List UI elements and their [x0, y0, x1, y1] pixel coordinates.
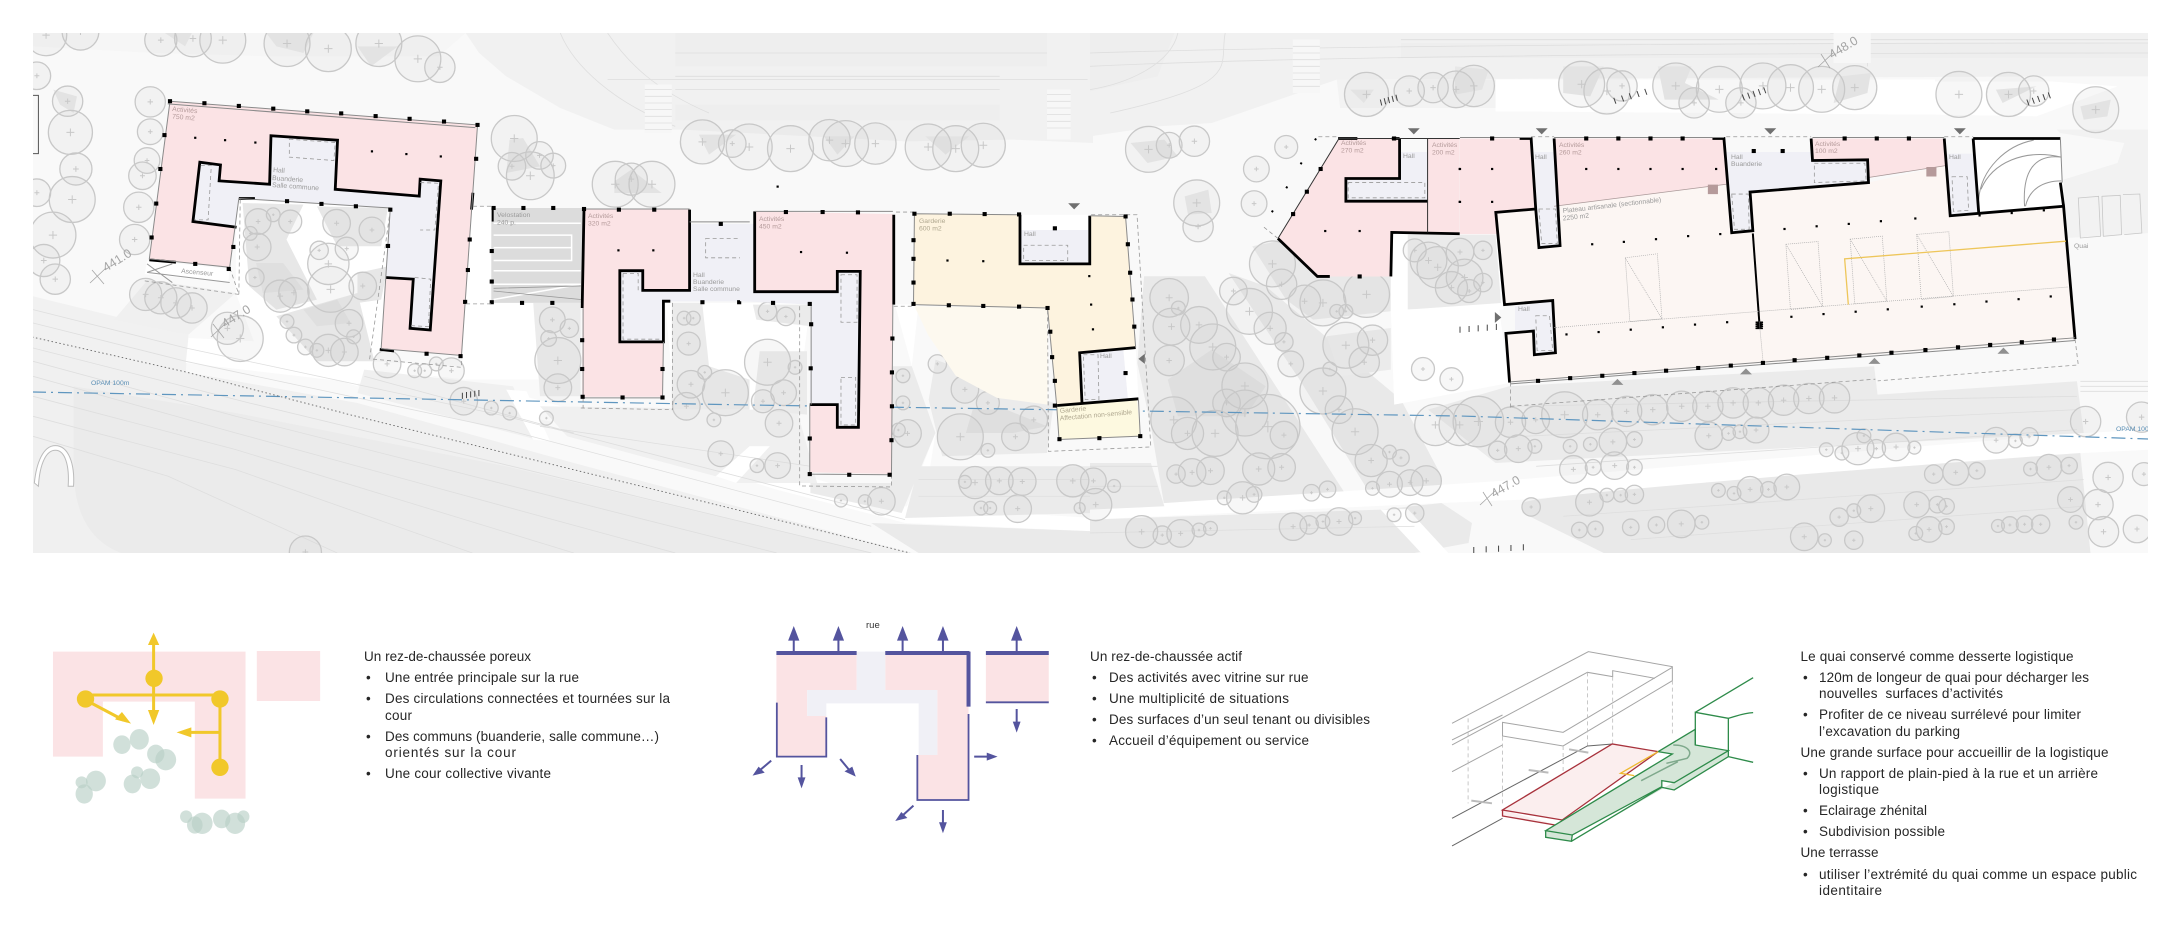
map labels: Salle commune: [693, 286, 740, 293]
map labels: Velostation: [497, 212, 530, 219]
elevator forecourt: [145, 261, 230, 283]
map labels: 270 m2: [1341, 148, 1364, 154]
map labels: Activités: [1432, 142, 1458, 149]
text: quay: Une grande surface pour accueillir de la logistique: [1800, 745, 2108, 760]
west section ground: [33, 33, 1093, 553]
text: active ground floor: Un rez-de-chaussée actif: [1090, 649, 1242, 664]
active facades: [776, 652, 1049, 707]
text: quay: identitaire: [1819, 883, 1882, 898]
activities 100 m2: [1813, 138, 1946, 177]
map labels: Plateau artisanale (sectionnable): [1562, 197, 1662, 215]
east section ground: [1090, 33, 2150, 553]
central trees: [726, 71, 1480, 548]
small vehicles: [1471, 749, 1588, 803]
text: quay: •: [1803, 766, 1808, 781]
tree masses: [23, 13, 748, 568]
text: porous ground floor: [364, 649, 670, 781]
green trees: [76, 729, 249, 834]
map labels: 448.0: [1826, 33, 1860, 62]
OPAM 100m limit line: [32, 392, 2148, 439]
west buildings: [145, 99, 760, 410]
garderie courtyard: [914, 306, 1048, 405]
text: quay: •: [1803, 803, 1808, 818]
map labels: Buanderie: [272, 175, 303, 184]
space beside velostation: [462, 206, 581, 380]
plan ground: [33, 33, 2148, 553]
map labels: OPAM 100m: [91, 380, 130, 387]
text: active ground floor: •: [1092, 733, 1097, 748]
map labels: Activités: [1559, 142, 1585, 149]
activities 260 m2: [1554, 138, 1726, 206]
yellow access: [1620, 752, 1658, 776]
text: quay: l’excavation du parking: [1819, 724, 1960, 739]
entrance markers: [1495, 128, 2009, 385]
garderie walls: [1020, 215, 1138, 406]
quay access line: [1845, 241, 2066, 305]
ramp room: [1973, 138, 2064, 212]
upper volumes: [1452, 652, 1672, 772]
map labels: Activités: [172, 106, 198, 115]
map labels: Buanderie: [1731, 161, 1762, 168]
map labels: Hall: [693, 272, 705, 279]
text: quay: Subdivision possible: [1819, 824, 1945, 839]
text: active ground floor: Accueil d’équipement ou service: [1109, 733, 1309, 748]
map labels: 441.0: [100, 246, 134, 275]
bicycle racks: [1460, 87, 2051, 553]
garderie: [914, 214, 1136, 405]
text: quay: Une terrasse: [1800, 845, 1878, 860]
courtyard 1: [236, 200, 466, 386]
map labels: [90, 33, 2155, 506]
central lawns: [1137, 273, 1442, 506]
text: porous ground floor: •: [366, 691, 371, 706]
map labels: Activités: [588, 213, 614, 220]
walls: [1496, 138, 2075, 383]
map labels: Activités: [759, 216, 785, 223]
building 1 walls: [149, 136, 473, 351]
map labels: Hall: [1403, 153, 1415, 160]
garderie non-sensitive space: [1057, 400, 1140, 440]
building 1 pillars: [150, 99, 480, 358]
tree-bed blobs: [53, 33, 969, 193]
east trees: [1446, 61, 2157, 551]
text: porous ground floor: •: [366, 670, 371, 685]
text: quay: 120m de longeur de quai pour décharger les: [1819, 670, 2089, 685]
text: active ground floor: •: [1092, 691, 1097, 706]
text: quay: •: [1803, 707, 1808, 722]
map labels: 320 m2: [588, 220, 611, 228]
text: quay: Un rapport de plain-pied à la rue et un arrière: [1819, 766, 2098, 781]
text: quay: •: [1803, 867, 1808, 882]
text: quay: •: [1803, 824, 1808, 839]
map labels: Hall: [1731, 154, 1743, 161]
map labels: 600 m2: [919, 226, 942, 232]
facade pillars: [1490, 136, 2056, 383]
diagram: active ground floor: [753, 626, 1049, 833]
northeast building walls: [1278, 138, 1460, 276]
map labels: 200 m2: [1432, 150, 1455, 156]
map labels: Ascenseur: [181, 268, 214, 278]
activities 200 m2: [1460, 138, 1534, 234]
green quay: [1546, 729, 1728, 841]
text: porous ground floor: Une cour collective vivante: [385, 766, 551, 781]
text: quay: nouvelles surfaces d’activités: [1819, 686, 2003, 701]
building 3: circulation: [740, 225, 860, 427]
text: active ground floor: Une multiplicité de situations: [1109, 691, 1289, 706]
map labels: Hall: [1518, 306, 1530, 313]
building 2: activities: [582, 209, 690, 397]
northeast building: activities: [1278, 138, 1460, 276]
text: active ground floor: Des surfaces d’un seul tenant ou divisibles: [1109, 712, 1370, 727]
text: quay: Eclairage zhénital: [1819, 803, 1927, 818]
halls: [1515, 152, 1978, 355]
map labels: 260 m2: [1559, 150, 1582, 156]
map labels: 447.0: [219, 302, 253, 331]
map labels: OPAM 100m: [2116, 426, 2155, 433]
text: porous ground floor: Des circulations connectées et tournées sur la: [385, 691, 670, 706]
logistics arrows: [1641, 745, 1690, 781]
tree-bed blobs: [1131, 66, 2111, 215]
blue arrows: [753, 626, 1022, 833]
map labels: Garderie: [1060, 406, 1087, 415]
map labels: 100 m2: [1815, 148, 1838, 155]
courtyard 2: [750, 409, 753, 410]
pink plan: [776, 653, 1049, 800]
map labels: Hall: [1100, 353, 1112, 360]
red activity volume: [1503, 744, 1658, 826]
map labels: Quai: [2074, 243, 2089, 250]
map labels: Hall: [273, 167, 286, 175]
text: porous ground floor: •: [366, 766, 371, 781]
text: quay: Le quai conservé comme desserte logistique: [1800, 649, 2074, 664]
northeast building: hall: [1346, 152, 1428, 201]
text: quay: [1800, 649, 2137, 898]
text: quay: logistique: [1819, 782, 1879, 797]
text: active ground floor: Des activités avec vitrine sur rue: [1109, 670, 1308, 685]
plateau artisanal: [1497, 166, 2075, 383]
central buildings: [740, 95, 1461, 487]
text: porous ground floor: orientés sur la cour: [385, 745, 516, 760]
text: quay: utiliser l’extrémité du quai comme un espace public: [1819, 867, 2137, 882]
building 3 walls: [755, 211, 894, 427]
label: rue: rue: [866, 620, 880, 631]
map labels: 450 m2: [759, 224, 782, 230]
velostation: [490, 206, 583, 305]
map labels: 2250 m2: [1562, 213, 1590, 222]
map labels: 447.0: [1488, 473, 1523, 501]
text: porous ground floor: cour: [385, 708, 412, 723]
garderie halls: [1021, 230, 1128, 401]
map labels: 240 p.: [497, 220, 516, 226]
map labels: Buanderie: [693, 279, 724, 286]
circulation: [807, 652, 937, 755]
east building: [1459, 87, 2078, 553]
text: active ground floor: •: [1092, 670, 1097, 685]
site plan: [23, 13, 2157, 568]
map labels: Hall: [1949, 154, 1961, 161]
south lawns: [1428, 366, 2084, 463]
building 2 walls: [582, 208, 690, 342]
text: quay: •: [1803, 670, 1808, 685]
map labels: Activités: [1341, 140, 1367, 147]
text: porous ground floor: Une entrée principale sur la rue: [385, 670, 579, 685]
interior columns: [1459, 168, 2052, 336]
building 1: circulation: [193, 136, 441, 330]
map labels: Affectation non-sensible: [1060, 409, 1133, 422]
text: quay: Profiter de ce niveau surrélevé pour limiter: [1819, 707, 2082, 722]
map labels: Hall: [1535, 154, 1547, 161]
pink building outline: [53, 651, 320, 799]
map labels: Salle commune: [272, 182, 319, 192]
diagram: axonometric of quay: [1452, 652, 1753, 846]
text: porous ground floor: Des communs (buanderie, salle commune…): [385, 729, 659, 744]
building 2: circulation: [620, 224, 760, 342]
ground lines: [1452, 744, 1613, 846]
map labels: Hall: [1024, 231, 1036, 238]
building 1: activities: [149, 101, 478, 355]
text: active ground floor: [1090, 649, 1370, 748]
text: porous ground floor: Un rez-de-chaussée poreux: [364, 649, 531, 664]
building 3: activities: [754, 211, 893, 474]
east of building 3: [810, 366, 935, 513]
text: porous ground floor: •: [366, 729, 371, 744]
yellow circulation arrows: [77, 633, 229, 776]
rail boundary dotted line: [32, 337, 910, 553]
diagram: porous ground floor: [53, 633, 320, 834]
map labels: Garderie: [919, 218, 946, 225]
text: active ground floor: •: [1092, 712, 1097, 727]
map labels: 750 m2: [172, 114, 195, 122]
map labels: Activités: [1815, 141, 1841, 148]
